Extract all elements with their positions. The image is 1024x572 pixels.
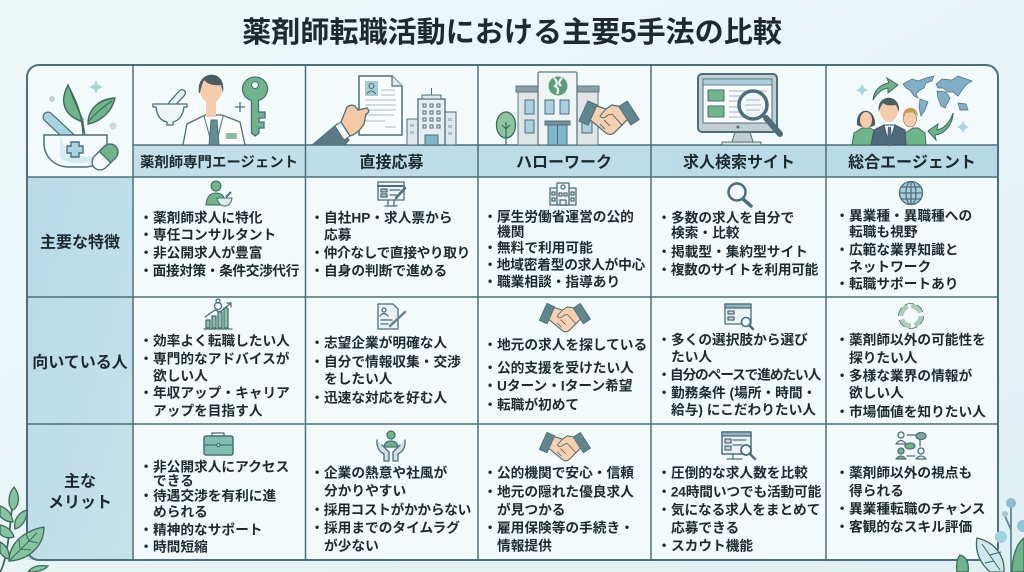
text: 主要な特徴 求人検索サイト: ・複数のサイトを利用可能 <box>657 262 819 278</box>
text: 主なメリット ハローワーク <box>483 464 634 554</box>
icon: document with pen <box>378 304 405 329</box>
icon: monitor with magnifier <box>698 74 780 145</box>
text: 主要な特徴 総合エージェント <box>835 208 972 292</box>
text: 主なメリット 求人検索サイト <box>657 464 822 554</box>
icon: recycle arrows <box>898 304 924 328</box>
row label: 主なメリット <box>48 472 112 512</box>
text: 主なメリット 直接応募: 分かりやすい <box>324 484 406 498</box>
text: 向いている人 直接応募 <box>310 334 461 406</box>
icon: resume in hand and building <box>312 76 456 145</box>
text: 主要な特徴 薬剤師専門エージェント: ・専任コンサルタント <box>139 226 276 242</box>
text: 主なメリット ハローワーク: ・雇用保険等の手続き・ <box>483 520 634 536</box>
text: 主なメリット 直接応募: ・採用コストがかからない <box>310 502 471 518</box>
text: 主要な特徴 求人検索サイト <box>657 210 819 278</box>
text: 主要な特徴 総合エージェント: ・異業種・異職種への <box>835 208 972 224</box>
text: 主要な特徴 直接応募: 応募 <box>324 226 352 242</box>
text: 向いている人 求人検索サイト: たい人 <box>671 350 712 364</box>
text: 向いている人 ハローワーク <box>483 336 647 412</box>
text: 主要な特徴 ハローワーク: 機関 <box>497 224 524 240</box>
text: 主要な特徴 求人検索サイト: ・掲載型・集約型サイト <box>657 244 808 260</box>
text: 主なメリット 薬剤師専門エージェント: ・待遇交渉を有利に進 <box>139 488 276 504</box>
text: 向いている人 薬剤師専門エージェント <box>139 332 290 418</box>
icon: form on screen <box>378 182 405 206</box>
text: 向いている人 総合エージェント: ・市場価値を知りたい人 <box>835 404 986 420</box>
icon: growth chart <box>204 299 232 329</box>
icon: briefcase <box>204 433 233 455</box>
header labels: 薬剤師専門エージェント <box>140 153 298 171</box>
text: 主なメリット 薬剤師専門エージェント: められる <box>153 504 208 520</box>
text: 主要な特徴 ハローワーク: ・地域密着型の求人が中心 <box>483 256 646 272</box>
text: 主なメリット 求人検索サイト: ・気になる求人をまとめて <box>657 502 820 518</box>
header labels: 求人検索サイト <box>683 152 795 172</box>
text: 向いている人 薬剤師専門エージェント: 欲しい人 <box>153 368 208 384</box>
header labels: 直接応募 <box>359 152 424 172</box>
text: 主なメリット 求人検索サイト: ・圧倒的な求人数を比較 <box>657 464 808 480</box>
text: 主なメリット 総合エージェント: ・客観的なスキル評価 <box>835 518 972 534</box>
text: 主なメリット 薬剤師専門エージェント: ・時間短縮 <box>139 538 208 554</box>
text: 主なメリット 求人検索サイト: 応募できる <box>671 520 739 536</box>
row label: 向いている人: 向いている人 <box>32 354 128 372</box>
text: 主なメリット ハローワーク: ・地元の隠れた優良求人 <box>483 484 634 500</box>
text: 向いている人 総合エージェント: ・薬剤師以外の可能性を <box>835 332 986 348</box>
text: 主なメリット ハローワーク: 情報提供 <box>497 538 552 554</box>
text: 主なメリット 薬剤師専門エージェント: ・非公開求人にアクセス <box>139 458 289 474</box>
text: 主要な特徴 総合エージェント: ネットワーク <box>849 260 931 274</box>
text: 主要な特徴 求人検索サイト: 検索・比較 <box>671 224 740 240</box>
text: 向いている人 求人検索サイト: ・自分のペースで進めたい人 <box>657 366 822 382</box>
text: 主なメリット 直接応募 <box>310 464 471 554</box>
icon: pharmacist with mortar and key <box>153 75 268 145</box>
icon: Hello Work office with handshake <box>496 72 639 145</box>
text: 主なメリット 総合エージェント <box>835 464 985 534</box>
text: 主なメリット 求人検索サイト: ・24時間いつでも活動可能 <box>657 484 822 500</box>
text: 向いている人 薬剤師専門エージェント: ・年収アップ・キャリア <box>139 384 290 400</box>
text: 主要な特徴 ハローワーク: ・無料で利用可能 <box>483 240 593 256</box>
text: 向いている人 総合エージェント: 探りたい人 <box>849 350 918 366</box>
text: 主要な特徴 求人検索サイト: ・多数の求人を自分で <box>657 210 794 226</box>
text: 向いている人 直接応募: をしたい人 <box>324 372 393 386</box>
text: 主要な特徴 薬剤師専門エージェント: ・面接対策・条件交渉代行 <box>139 262 300 278</box>
text: 主なメリット 総合エージェント: ・異業種転職のチャンス <box>835 500 985 516</box>
text: 主要な特徴 総合エージェント: ・転職サポートあり <box>835 276 959 292</box>
icon: globe <box>900 182 922 204</box>
text: 主要な特徴 総合エージェント: 転職も視野 <box>849 224 918 240</box>
icon: magnifier <box>728 184 751 206</box>
text: 主要な特徴 ハローワーク: ・職業相談・指導あり <box>483 274 620 290</box>
text: 主なメリット ハローワーク: ・公的機関で安心・信頼 <box>483 464 634 480</box>
title: 薬剤師転職活動における主要5手法の比較 <box>242 16 782 49</box>
text: 向いている人 総合エージェント: 欲しい人 <box>849 384 904 400</box>
text: 向いている人 薬剤師専門エージェント: ・専門的なアドバイスが <box>139 350 290 366</box>
text: 主要な特徴 総合エージェント: ・広範な業界知識と <box>835 242 959 258</box>
text: 主要な特徴 薬剤師専門エージェント: ・薬剤師求人に特化 <box>139 210 263 226</box>
row label: 主要な特徴: 主要な特徴 <box>40 232 120 252</box>
text: 向いている人 総合エージェント: ・多様な業界の情報が <box>835 368 972 384</box>
decoration: bottom right leaves <box>957 498 1024 572</box>
text: 主なメリット 総合エージェント: ・薬剤師以外の視点も <box>835 464 972 480</box>
text: 主なメリット 直接応募: ・企業の熱意や社風が <box>310 464 447 480</box>
icon: network of people <box>896 432 926 459</box>
text: 主要な特徴 ハローワーク: ・厚生労働省運営の公的 <box>483 208 634 224</box>
text: 向いている人 求人検索サイト: ・勤務条件 (場所・時間・ <box>657 384 816 400</box>
text: 主要な特徴 直接応募: ・自身の判断で進める <box>310 262 447 278</box>
text: 向いている人 求人検索サイト: ・多くの選択肢から選び <box>657 332 808 348</box>
text: 向いている人 ハローワーク: ・転職が初めて <box>483 396 579 412</box>
text: 向いている人 求人検索サイト <box>657 332 822 418</box>
icon: search on monitor <box>722 432 755 459</box>
text: 向いている人 ハローワーク: ・公的支援を受けたい人 <box>483 360 634 376</box>
text: 主なメリット 薬剤師専門エージェント <box>139 458 289 554</box>
text: 向いている人 ハローワーク: ・Uターン・Iターン希望 <box>483 378 633 394</box>
text: 主なメリット 薬剤師専門エージェント: ・精神的なサポート <box>139 522 263 538</box>
icon: person with mortar <box>206 181 232 206</box>
icon: search window <box>725 304 753 329</box>
decoration: bottom left leaves <box>0 487 48 572</box>
header labels: ハローワーク <box>516 154 612 172</box>
text: 主要な特徴 ハローワーク <box>483 208 646 290</box>
text: 主要な特徴 直接応募 <box>310 210 470 278</box>
text: 向いている人 求人検索サイト: 給与) にこだわりたい人 <box>671 402 816 418</box>
text: 主なメリット 求人検索サイト: ・スカウト機能 <box>657 538 753 554</box>
text: 向いている人 直接応募: ・自分で情報収集・交渉 <box>310 354 461 370</box>
text: 主要な特徴 薬剤師専門エージェント <box>139 210 300 278</box>
icon: world map with people <box>852 76 972 145</box>
icon: government building <box>550 183 576 205</box>
text: 主なメリット 直接応募: ・採用までのタイムラグ <box>310 520 460 536</box>
text: 主なメリット 直接応募: が少ない <box>324 538 379 554</box>
text: 主なメリット ハローワーク: が見つかる <box>497 502 565 518</box>
icon: hands holding person <box>377 431 405 461</box>
icon: mortar with herbs <box>44 80 121 173</box>
icon: handshake <box>539 432 591 461</box>
header labels <box>140 152 976 172</box>
text: 主要な特徴 直接応募: ・自社HP・求人票から <box>310 210 453 226</box>
text: 主なメリット 薬剤師専門エージェント: できる <box>153 474 194 488</box>
text: 主要な特徴 直接応募: ・仲介なしで直接やり取り <box>310 244 470 260</box>
text: 向いている人 薬剤師専門エージェント: アップを目指す人 <box>153 402 263 418</box>
text: 向いている人 直接応募: ・志望企業が明確な人 <box>310 334 447 350</box>
text: 向いている人 直接応募: ・迅速な対応を好む人 <box>310 390 447 406</box>
text: 主要な特徴 薬剤師専門エージェント: ・非公開求人が豊富 <box>139 244 263 260</box>
header labels: 総合エージェント <box>848 154 976 172</box>
row label: 主なメリット: 主な <box>64 472 96 490</box>
icon: handshake <box>539 303 591 332</box>
text: 向いている人 総合エージェント <box>835 332 986 420</box>
text: 向いている人 薬剤師専門エージェント: ・効率よく転職したい人 <box>139 332 290 348</box>
text: 主なメリット 総合エージェント: 得られる <box>849 484 904 498</box>
row label: 主なメリット: メリット <box>48 494 112 512</box>
text: 向いている人 ハローワーク: ・地元の求人を探している <box>483 336 647 352</box>
